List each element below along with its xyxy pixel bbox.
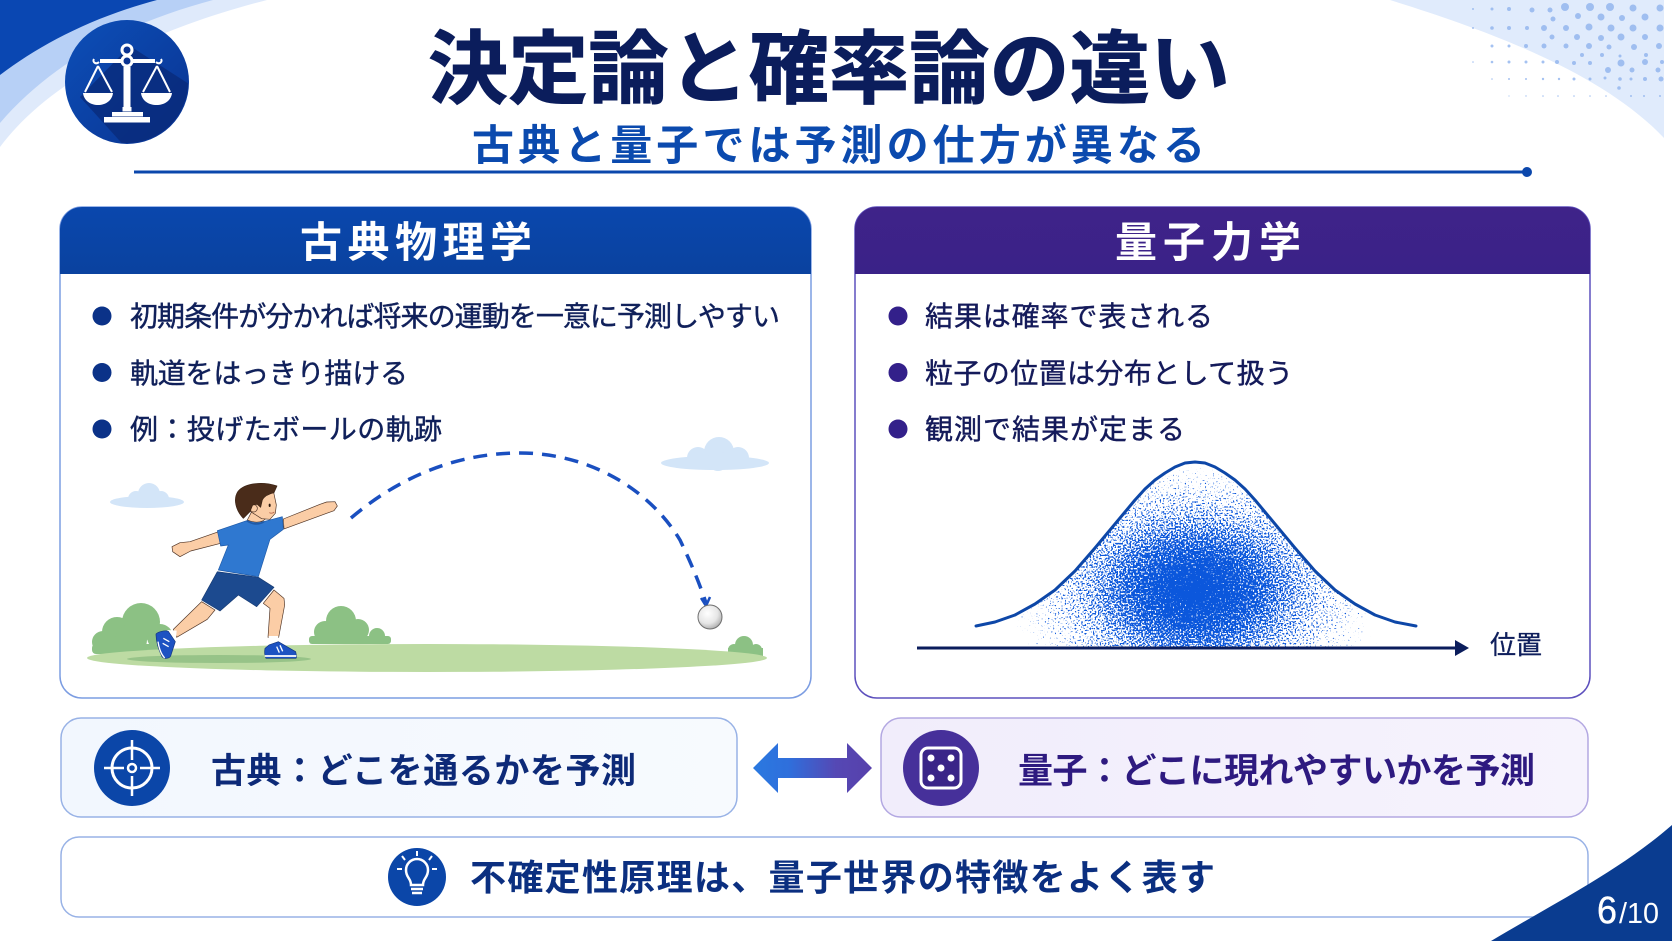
heading: classical physics: 古典物理学 (300, 219, 532, 266)
axis arrow (917, 640, 1469, 656)
comparison bar: classical (61, 718, 737, 817)
icon: target (94, 730, 170, 806)
bush middle (309, 606, 391, 644)
icon: balance scale (65, 20, 192, 150)
heading rule (134, 167, 1532, 177)
ball (698, 605, 722, 629)
bullet list: classical: 初期条件が分かれば将来の運動を一意に予測しやすい (130, 301, 780, 332)
bell curve (976, 462, 1416, 626)
icon: dice (903, 730, 979, 806)
text: uncertainty principle: 不確定性原理は、量子世界の特徴をよく表す (470, 857, 1215, 898)
cloud right (661, 437, 769, 471)
bullet list: quantum: 観測で結果が定まる (925, 414, 1185, 445)
panel: classical physics (60, 207, 811, 698)
comparison bar: quantum (881, 718, 1588, 817)
bullet list: classical: 例：投げたボールの軌跡 (130, 414, 442, 445)
bush right (728, 636, 763, 656)
icon: light bulb (388, 848, 446, 906)
background: top-right dotted swoosh (1390, 0, 1664, 138)
title: 決定論と確率論の違い (428, 25, 1230, 114)
double arrow (753, 743, 872, 793)
bullet list: quantum (888, 301, 1293, 445)
callout: uncertainty principle (61, 837, 1588, 917)
axis label: 位置 (1490, 630, 1542, 660)
panel header: classical physics (60, 207, 811, 274)
page number corner: /10 (1619, 898, 1659, 930)
chart: probability distribution (917, 450, 1542, 660)
cloud left (110, 483, 184, 508)
particle density (987, 466, 1414, 646)
panel header: quantum (855, 207, 1590, 274)
ground (87, 644, 767, 672)
page number corner: 6 (1597, 890, 1617, 932)
boy figure (156, 483, 337, 658)
bush left (92, 603, 173, 656)
bullet list: classical: 軌道をはっきり描ける (130, 358, 408, 389)
background: top-left swoosh (0, 0, 267, 147)
text: classical prediction: 古典：どこを通るかを予測 (211, 752, 636, 791)
panel: quantum mechanics (855, 207, 1590, 698)
bullet list: quantum: 結果は確率で表される (925, 301, 1213, 332)
subtitle: 古典と量子では予測の仕方が異なる (472, 122, 1205, 169)
bullet list: quantum: 粒子の位置は分布として扱う (925, 358, 1293, 389)
page number corner (1491, 825, 1672, 941)
trajectory (351, 453, 706, 603)
illustration: throwing a ball (87, 437, 769, 672)
heading: quantum: 量子力学 (1115, 219, 1301, 266)
text: quantum prediction: 量子：どこに現れやすいかを予測 (1018, 752, 1535, 791)
bullet list: classical (92, 301, 780, 445)
